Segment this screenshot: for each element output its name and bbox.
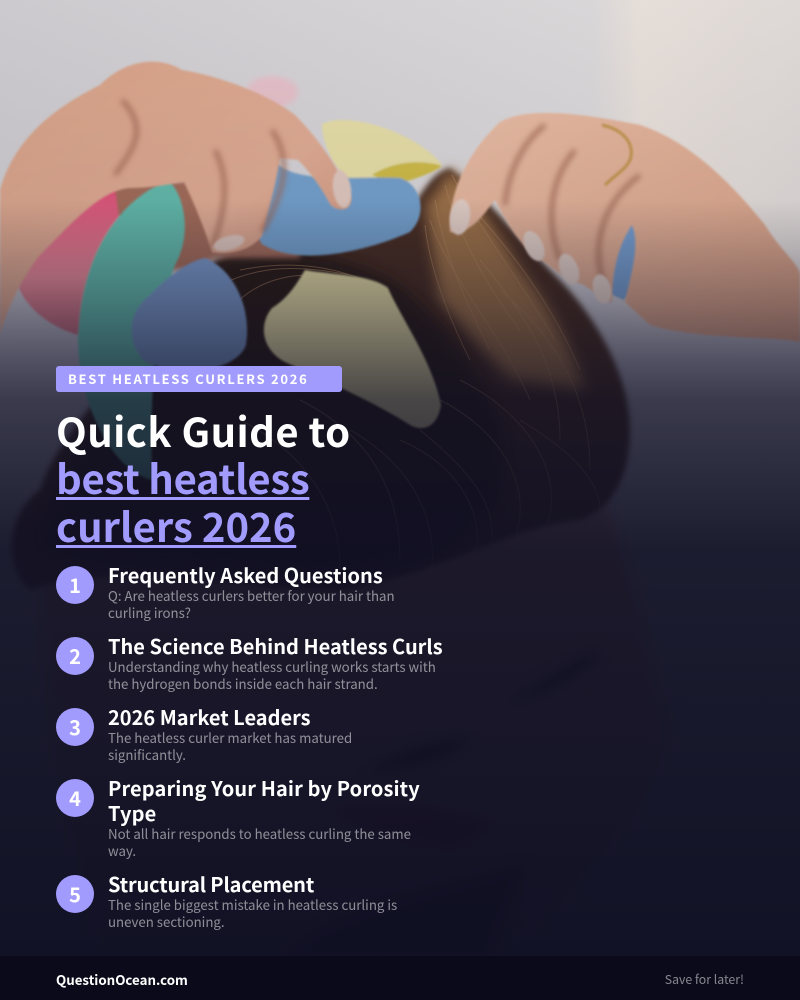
number badge 2: 2 [69, 641, 81, 670]
nails, ring and finger shading [115, 100, 640, 306]
title: best heatless [56, 448, 309, 506]
number badge 3 [56, 708, 94, 746]
teal roller [78, 180, 185, 480]
hair [12, 168, 630, 590]
title [56, 400, 351, 554]
number badge 5: 5 [69, 879, 81, 908]
foam rollers [14, 120, 442, 480]
list item 3 [56, 702, 352, 764]
description 3: significantly. [108, 745, 186, 764]
heading 4: Preparing Your Hair by Porosity [108, 773, 420, 802]
blue cap [132, 258, 247, 371]
footer site name: QuestionOcean.com [56, 970, 188, 989]
right hand [450, 113, 800, 342]
number badge 1 [56, 566, 94, 604]
number badge 1: 1 [69, 570, 81, 599]
badge: BEST HEATLESS CURLERS 2026 [68, 369, 308, 388]
heading 2: The Science Behind Heatless Curls [108, 631, 443, 660]
cream foam [264, 270, 441, 428]
face [38, 470, 670, 960]
heading 5: Structural Placement [108, 869, 314, 898]
number badge 2 [56, 637, 94, 675]
description 5: uneven sectioning. [108, 912, 225, 931]
footer bar [0, 956, 800, 1000]
shadowed skin behind the rollers [95, 180, 300, 270]
blue roller [255, 158, 421, 256]
description 2: the hydrogen bonds inside each hair strand. [108, 674, 378, 693]
description 1 [108, 586, 395, 622]
list item 5 [56, 869, 397, 931]
description 5 [108, 895, 397, 931]
description 4 [108, 824, 411, 860]
number badge 4 [56, 779, 94, 817]
heading 1: Frequently Asked Questions [108, 560, 383, 589]
left hand [0, 62, 351, 335]
title: Quick Guide to [56, 400, 351, 458]
yellow roller behind [322, 120, 442, 182]
title: curlers 2026 [56, 496, 296, 554]
heading 3: 2026 Market Leaders [108, 702, 311, 731]
number badge 4: 4 [69, 783, 81, 812]
description 2 [108, 657, 436, 693]
badge [56, 366, 342, 392]
description 3 [108, 728, 352, 764]
description 1: Q: Are heatless curlers better for your hair than [108, 586, 395, 605]
right blue roller [590, 190, 662, 300]
heading 4: Type [108, 798, 156, 827]
heading 4 [108, 773, 420, 827]
pink roller [14, 188, 125, 336]
number badge 5 [56, 875, 94, 913]
number badge 3: 3 [69, 712, 81, 741]
description 4: way. [108, 841, 136, 860]
description 2: Understanding why heatless curling works starts with [108, 657, 436, 676]
description 5: The single biggest mistake in heatless curling is [108, 895, 397, 914]
list item 4 [56, 773, 420, 860]
description 4: Not all hair responds to heatless curling the same [108, 824, 411, 843]
description 3: The heatless curler market has matured [108, 728, 352, 747]
list item 1 [56, 560, 395, 622]
footer call to action: Save for later! [665, 970, 744, 988]
description 1: curling irons? [108, 603, 191, 622]
list item 2 [56, 631, 443, 693]
